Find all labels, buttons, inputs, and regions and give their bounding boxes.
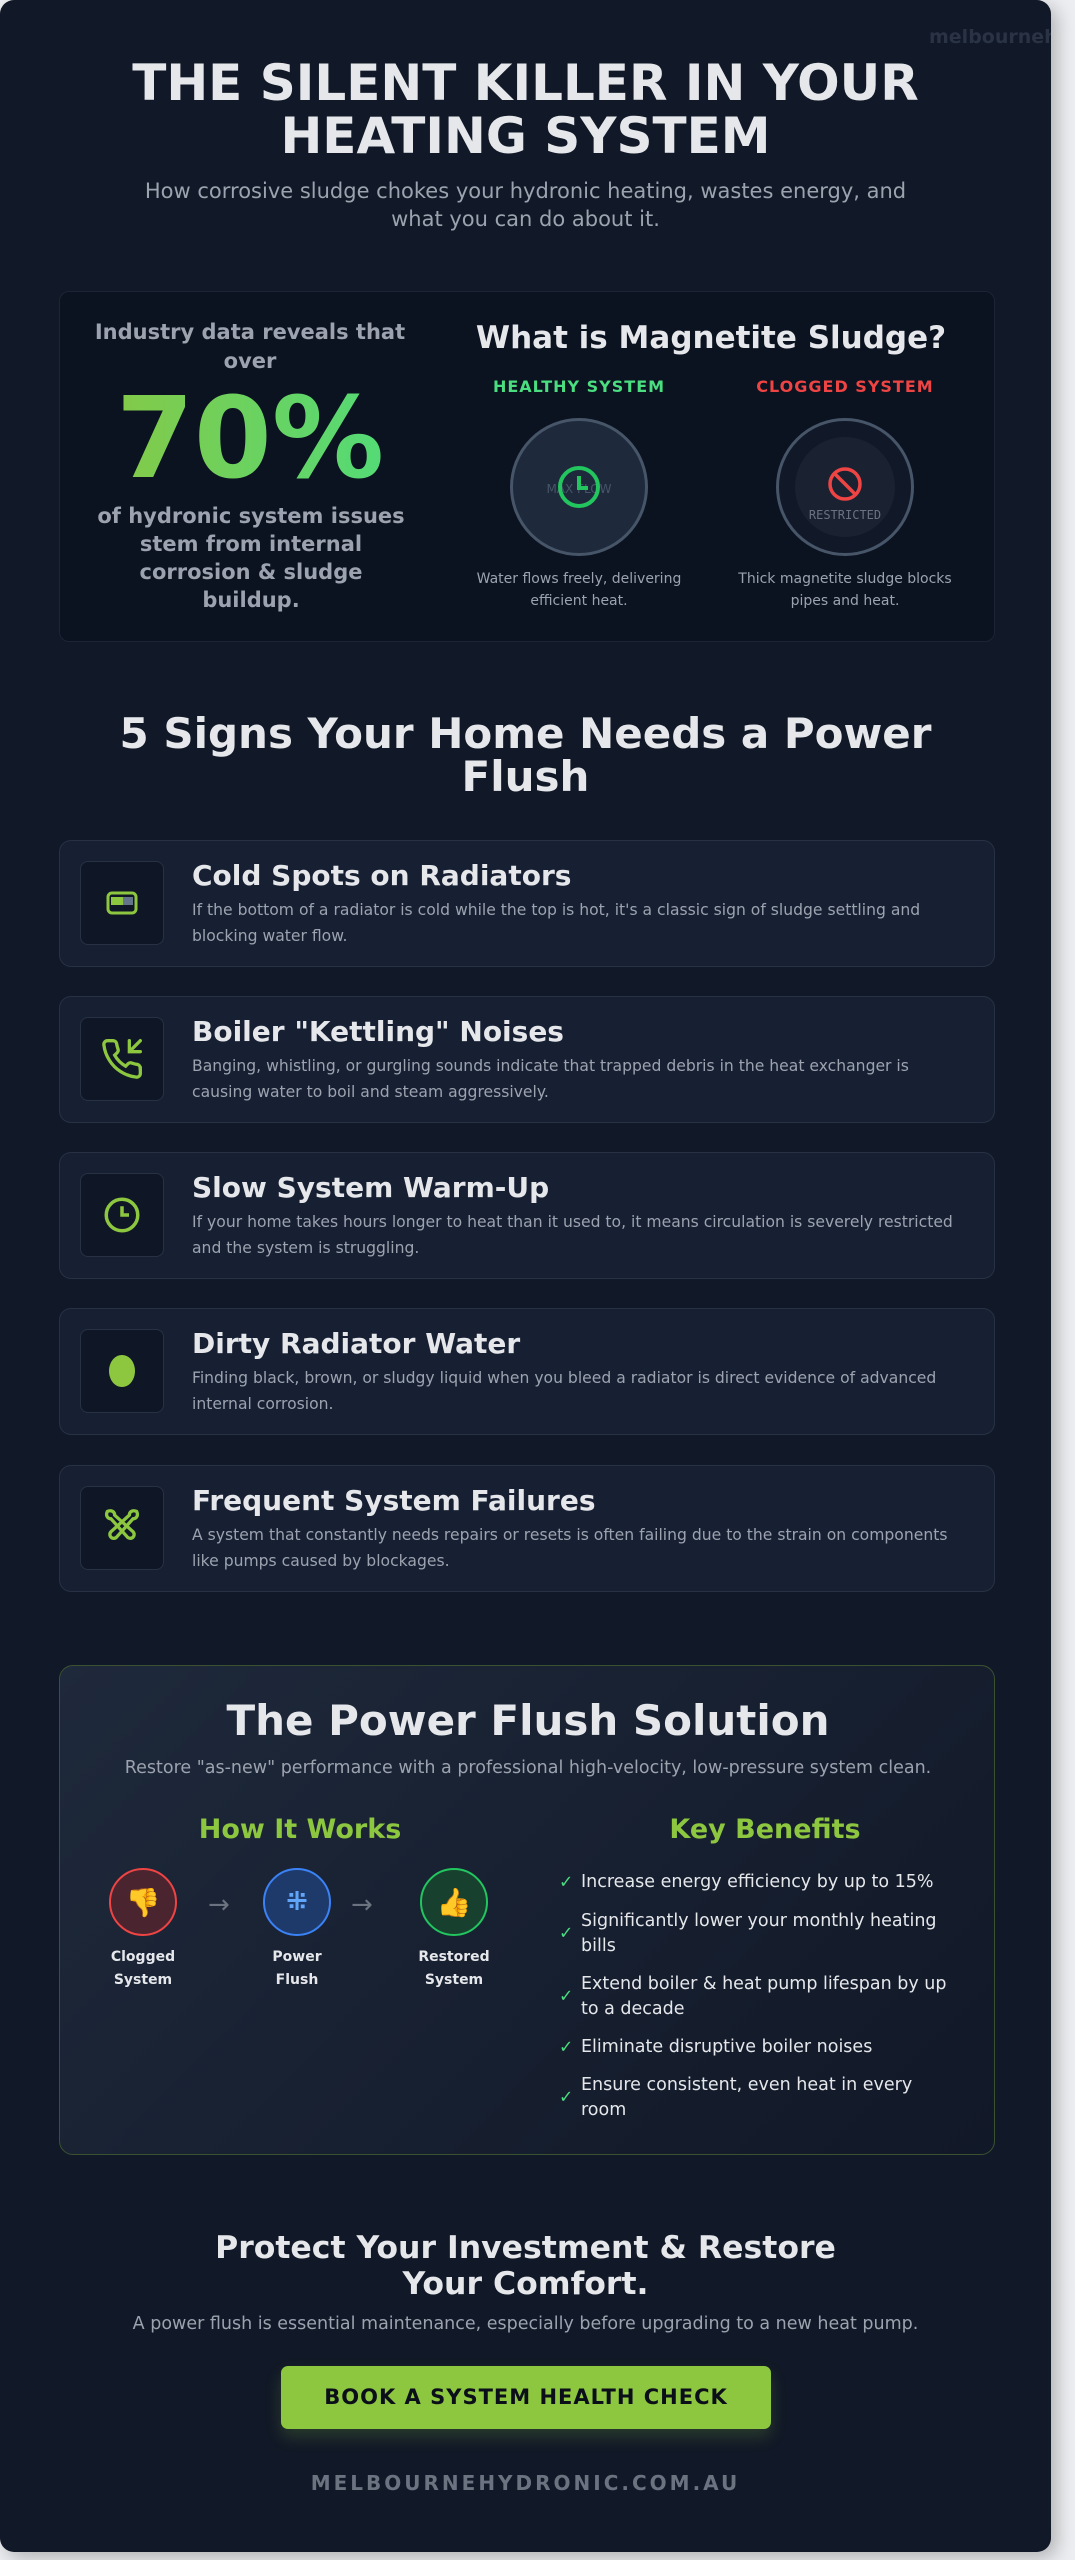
title (132, 54, 919, 165)
title: HEATING SYSTEM (280, 107, 771, 165)
healthy system: Water flows freely, delivering efficient heat. (477, 571, 681, 609)
step: flush: Flush (276, 1972, 318, 1988)
healthy system: HEALTHY SYSTEM (493, 377, 665, 396)
stat description: of hydronic system issues stem from internal corrosion & sludge buildup. (97, 504, 405, 612)
panel: power flush solution: Significantly lower your monthly heating bills (581, 1911, 937, 1956)
step: restored: System (425, 1972, 483, 1988)
sign 2: Banging, whistling, or gurgling sounds indicate that trapped debris in the heat exchanger is causing water to boil and steam aggressively. (192, 1057, 909, 1101)
arrow: → (208, 1890, 230, 1920)
arrow: → (351, 1890, 373, 1920)
icon: clogged pipe (776, 418, 914, 556)
heading: 5 signs: 5 Signs Your Home Needs a Power Flush (119, 709, 932, 801)
panel: power flush solution: Extend boiler & heat pump lifespan by up to a decade (581, 1974, 946, 2019)
step: restored: 👍 (437, 1886, 471, 1918)
CTA button: BOOK A SYSTEM HEALTH CHECK (324, 2385, 728, 2409)
panel: power flush solution: ✓ (559, 1924, 573, 1944)
panel: power flush solution: ✓ (559, 2037, 573, 2057)
stat intro: Industry data reveals that over (95, 320, 405, 373)
big stat 70%: 70% (116, 374, 384, 504)
icon: clogged pipe: RESTRICTED (809, 508, 881, 522)
step: restored: Restored (418, 1949, 490, 1965)
panel: power flush solution (59, 1665, 995, 2155)
panel: power flush solution: ✓ (559, 1872, 573, 1892)
subtitle: How corrosive sludge chokes your hydronic heating, wastes energy, and what you can do about it. (145, 179, 906, 231)
step: clogged (109, 1868, 177, 1988)
icon: drop (80, 1329, 164, 1413)
icon: tools (80, 1486, 164, 1570)
clogged system (738, 377, 952, 609)
panel: power flush solution: Eliminate disruptive boiler noises (581, 2037, 872, 2057)
sign 4: Finding black, brown, or sludgy liquid when you bleed a radiator is direct evidence of advanced internal corrosion. (192, 1369, 936, 1413)
icon: clock (80, 1173, 164, 1257)
magnetite heading: What is Magnetite Sludge? (476, 320, 946, 356)
icon: radiator (80, 861, 164, 945)
CTA heading: Protect Your Investment & Restore Your Comfort. (215, 2230, 836, 2302)
healthy system (477, 377, 681, 609)
footer url: MELBOURNEHYDRONIC.COM.AU (311, 2471, 740, 2495)
step: restored (418, 1868, 490, 1988)
benefits list (559, 1872, 946, 2120)
sign 1 (59, 840, 995, 967)
sign 4: Dirty Radiator Water (192, 1327, 520, 1360)
panel: power flush solution: Increase energy efficiency by up to 15% (581, 1872, 934, 1892)
sign 5 (59, 1465, 995, 1592)
key benefits heading: Key Benefits (669, 1814, 861, 1845)
big stat 70% (60, 372, 440, 507)
sign 3: If your home takes hours longer to heat than it used to, it means circulation is severely restricted and the system is struggling. (192, 1213, 953, 1257)
step: flush: ⁜ (286, 1886, 308, 1916)
clogged system: Thick magnetite sludge blocks pipes and heat. (738, 571, 952, 609)
panel: power flush solution: Ensure consistent, even heat in every room (581, 2075, 912, 2120)
panel: power flush solution: ✓ (559, 2088, 573, 2108)
how it works heading: How It Works (199, 1814, 401, 1845)
panel: stat and magnetite (59, 291, 995, 642)
sign 2: Boiler "Kettling" Noises (192, 1015, 564, 1048)
sign 3: Slow System Warm-Up (192, 1171, 549, 1204)
sign 5: Frequent System Failures (192, 1484, 596, 1517)
CTA button (281, 2366, 771, 2429)
CTA text: A power flush is essential maintenance, especially before upgrading to a new heat pump. (133, 2314, 918, 2334)
sign 5: A system that constantly needs repairs or resets is often failing due to the strain on components like pumps caused by blockages. (192, 1526, 947, 1570)
step: clogged: 👎 (126, 1886, 160, 1918)
icon: healthy pipe: MAX FLOW (546, 482, 612, 496)
step: flush (263, 1868, 331, 1988)
solution subtitle: Restore "as-new" performance with a professional high-velocity, low-pressure system clean. (125, 1758, 931, 1778)
icon: phone (80, 1017, 164, 1101)
step: clogged: System (114, 1972, 172, 1988)
icon: healthy pipe (510, 418, 648, 556)
step: clogged: Clogged (111, 1949, 175, 1965)
clogged system: CLOGGED SYSTEM (756, 377, 934, 396)
sign 4 (59, 1308, 995, 1435)
sign 1: If the bottom of a radiator is cold while the top is hot, it's a classic sign of sludge settling and blocking water flow. (192, 901, 920, 945)
title: THE SILENT KILLER IN YOUR (132, 54, 919, 112)
sign 2 (59, 996, 995, 1123)
solution title: The Power Flush Solution (226, 1696, 830, 1745)
step: flush: Power (272, 1949, 322, 1965)
sign 1: Cold Spots on Radiators (192, 859, 571, 892)
panel: power flush solution: ✓ (559, 1986, 573, 2006)
sign 3 (59, 1152, 995, 1279)
